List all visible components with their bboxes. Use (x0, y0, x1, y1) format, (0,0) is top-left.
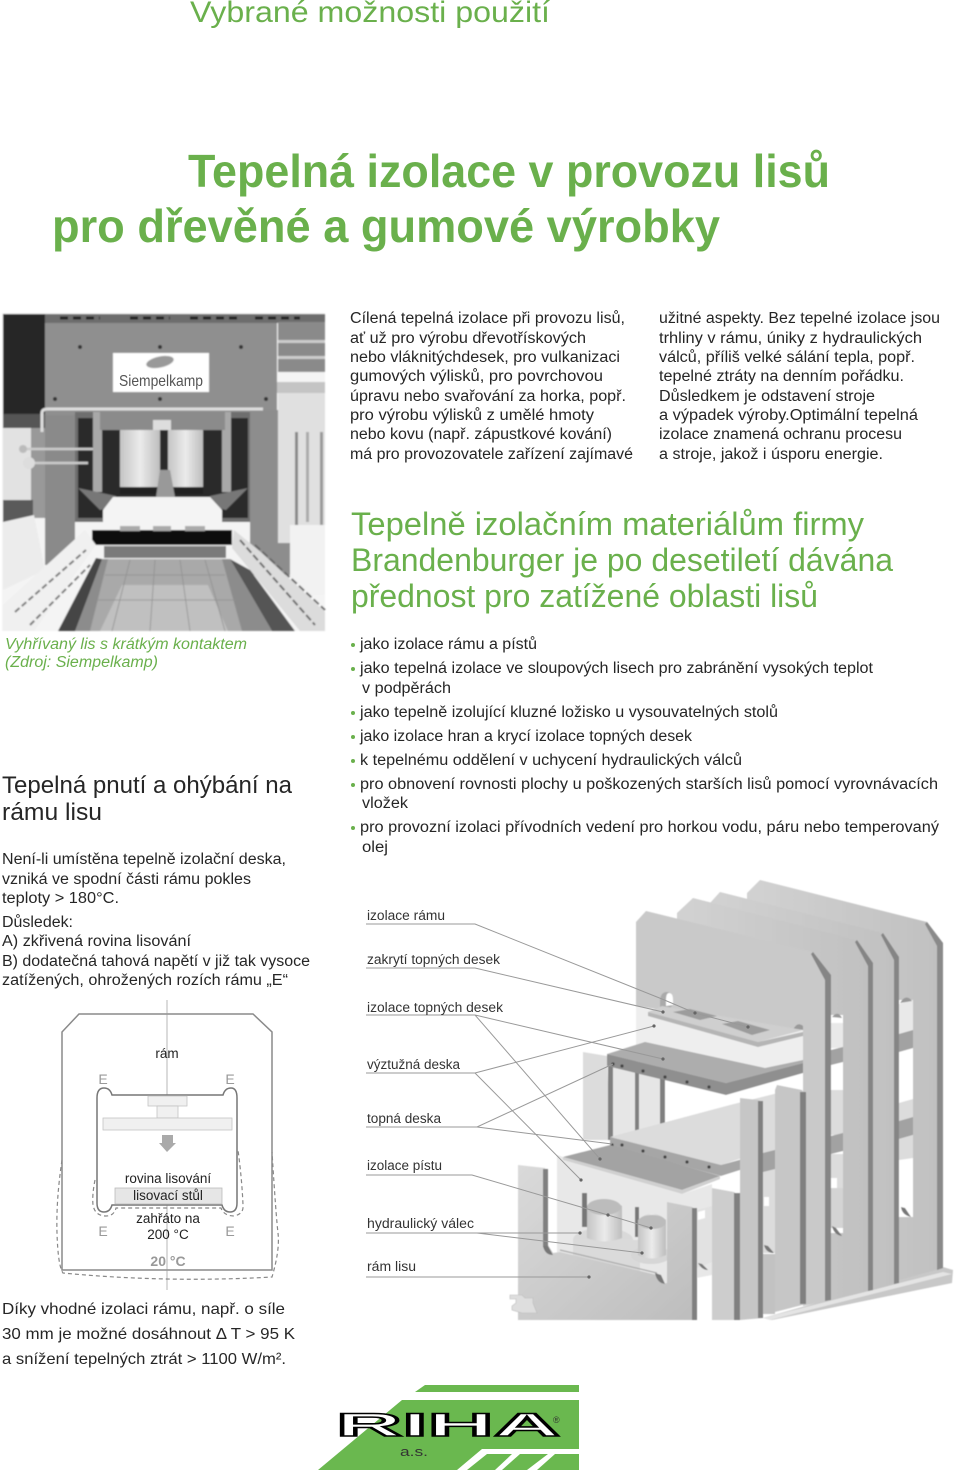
application bullet list (351, 636, 939, 856)
press illustration (510, 880, 953, 1320)
left heading: Tepelná pnutí a ohýbání na (2, 772, 293, 799)
text column 2: tepelné ztráty na denním pořádku. (659, 368, 904, 385)
back plate window (899, 997, 913, 1217)
list text: k tepelnému oddělení v uchycení hydraulických válců (360, 752, 742, 769)
press part labels: izolace topných desek (367, 1000, 503, 1015)
text column 1: gumových výlisků, pro povrchovou (350, 368, 603, 385)
left text block: vzniká ve spodní části rámu pokles (2, 871, 251, 888)
list text: v podpěrách (362, 680, 451, 697)
photo caption: Vyhřívaný lis s krátkým kontaktem (5, 636, 247, 653)
text column 2: a výpadek výroby.Optimální tepelná (659, 407, 918, 424)
diagram labels: rovina lisování (125, 1171, 211, 1186)
cover plates (673, 1009, 717, 1020)
leader lines (366, 924, 750, 1279)
list text: jako tepelně izolující kluzné ložisko u vysouvatelných stolů (359, 704, 778, 721)
press table (115, 1188, 222, 1204)
subheading (351, 506, 893, 614)
text column 1: pro výrobu výlisků z umělé hmoty (350, 407, 594, 424)
frame window (97, 1088, 237, 1212)
white area under plate 1 (583, 1050, 803, 1200)
rear slot bump (793, 1024, 803, 1031)
list text: pro provozní izolaci přívodních vedení pro horkou vodu, páru nebo temperovaný (360, 819, 939, 836)
diagram labels: rám (155, 1046, 179, 1061)
press part labels: hydraulický válec (367, 1216, 474, 1231)
text column 2: trhliny v rámu, úniky z hydraulických (659, 330, 922, 347)
left text block: zatížených, ohrožených rozích rámu „E“ (2, 972, 288, 989)
photo logo text: Siempelkamp (119, 373, 203, 390)
diagram labels: lisovací stůl (133, 1188, 203, 1203)
plate 1 (636, 911, 831, 1306)
upper press parts (103, 1096, 232, 1130)
press part labels: topná deska (367, 1111, 441, 1126)
upper insulation block (636, 1006, 803, 1068)
notches (543, 1246, 665, 1284)
corner markers (98, 1071, 235, 1239)
bottom note: a snížení tepelných ztrát > 1100 W/m². (2, 1351, 286, 1368)
corner markers: E (225, 1071, 235, 1087)
logo RIHA (318, 1385, 579, 1470)
press part labels (367, 908, 503, 1274)
a.s.: a.s. (400, 1444, 428, 1459)
list text: jako izolace rámu a pístů (359, 636, 537, 653)
machine foot (510, 1295, 537, 1313)
press part labels: izolace pístu (367, 1158, 442, 1173)
lower frames (775, 1085, 806, 1312)
press part labels: rám lisu (367, 1259, 416, 1274)
text column 1 (350, 310, 633, 463)
diagram labels (125, 1046, 211, 1242)
temperature 20: 20 °C (150, 1253, 186, 1269)
front lower plate (518, 1165, 697, 1320)
text column 2: Důsledkem je odstavení stroje (659, 388, 875, 405)
photo caption (5, 636, 247, 671)
list text: jako tepelná izolace ve sloupových lisech pro zabránění vysokých teplot (359, 660, 874, 677)
title: Tepelná izolace v provozu lisů (188, 145, 830, 197)
press part labels: výztužná deska (367, 1057, 460, 1072)
frame deformation diagram (57, 1000, 278, 1290)
press part labels: zakrytí topných desek (367, 952, 500, 967)
subheading: přednost pro zatížené oblasti lisů (351, 578, 818, 614)
corner markers: E (225, 1223, 235, 1239)
left text block: Důsledek: (2, 914, 73, 931)
platen holes (611, 1062, 711, 1089)
left text block: A) zkřivená rovina lisování (2, 933, 192, 950)
text column 1: úpravu nebo svařování za horka, popř. (350, 388, 626, 405)
diagram labels: 200 °C (147, 1227, 189, 1242)
text column 2: užitné aspekty. Bez tepelné izolace jsou (659, 310, 940, 327)
list text: jako izolace hran a krycí izolace topných desek (359, 728, 692, 745)
diagram labels: zahřáto na (136, 1211, 200, 1226)
logo wordmark: RIHA (336, 1407, 560, 1443)
lower holes (610, 1143, 711, 1169)
left text block: Není-li umístěna tepelně izolační deska, (2, 851, 286, 868)
text column 1: nebo kovu (např. zápustkové kování) (350, 426, 612, 443)
upper platen (607, 1042, 803, 1083)
plate 2 (677, 898, 873, 1300)
window gap (697, 1206, 712, 1268)
hydraulic cylinders (573, 1193, 671, 1275)
inner window strip (763, 1098, 775, 1314)
text column 2: izolace znamená ochranu procesu (659, 426, 902, 443)
left text block: teploty > 180°C. (2, 890, 119, 907)
deformed outline (57, 1150, 278, 1279)
text column 1: má pro provozovatele zařízení zajímavé (350, 446, 633, 463)
text column 2 (659, 310, 940, 463)
frame outline (62, 1014, 272, 1270)
frame slot (660, 992, 673, 1012)
front upper columns (583, 1052, 610, 1140)
photo caption: (Zdroj: Siempelkamp) (5, 654, 158, 671)
leader dots (578, 1010, 750, 1279)
bottom note (2, 1301, 295, 1368)
subheading: Brandenburger je po desetiletí dávána (351, 542, 893, 578)
left text block: B) dodatečná tahová napětí v již tak vysoce (2, 953, 310, 970)
list text: olej (362, 839, 388, 856)
subheading: Tepelně izolačním materiálům firmy (351, 506, 864, 542)
list text: pro obnovení rovnosti plochy u poškozených starších lisů pomocí vyrovnávacích (360, 776, 938, 793)
back plate (747, 880, 943, 1280)
bottom note: Díky vhodné izolaci rámu, např. o síle (2, 1301, 285, 1318)
list text (359, 636, 939, 856)
registered mark: ® (553, 1415, 560, 1425)
text column 1: ať už pro výrobu dřevotřískových (350, 330, 586, 347)
left text block (2, 851, 310, 989)
text column 1: Cílená tepelná izolace při provozu lisů, (350, 310, 625, 327)
photo: Siempelkamp press (2, 313, 325, 631)
lower insulation plate (563, 1145, 720, 1190)
lower platen (610, 1090, 790, 1165)
centre axis (166, 1000, 168, 1290)
list text: vložek (362, 795, 408, 812)
text column 1: nebo vláknitýchdesek, pro vulkanizaci (350, 349, 620, 366)
left heading (2, 772, 293, 826)
base rail (763, 1267, 953, 1320)
logo green shapes (318, 1385, 579, 1470)
bottom note: 30 mm je možné dosáhnout Δ T > 95 K (2, 1326, 295, 1343)
title: pro dřevěné a gumové výrobky (52, 200, 720, 252)
plate 3 (710, 892, 899, 1290)
bullets (351, 643, 355, 830)
corner markers: E (98, 1223, 108, 1239)
corner markers: E (98, 1071, 108, 1087)
text column 2: válců, příliš velké sálání tepla, popř. (659, 349, 915, 366)
left heading: rámu lisu (2, 799, 102, 826)
title (52, 145, 830, 252)
text column 2: a stroje, jakož i úsporu energie. (659, 446, 883, 463)
plate 2 window (831, 1014, 843, 1236)
press part labels: izolace rámu (367, 908, 445, 923)
press arrow (159, 1135, 176, 1152)
